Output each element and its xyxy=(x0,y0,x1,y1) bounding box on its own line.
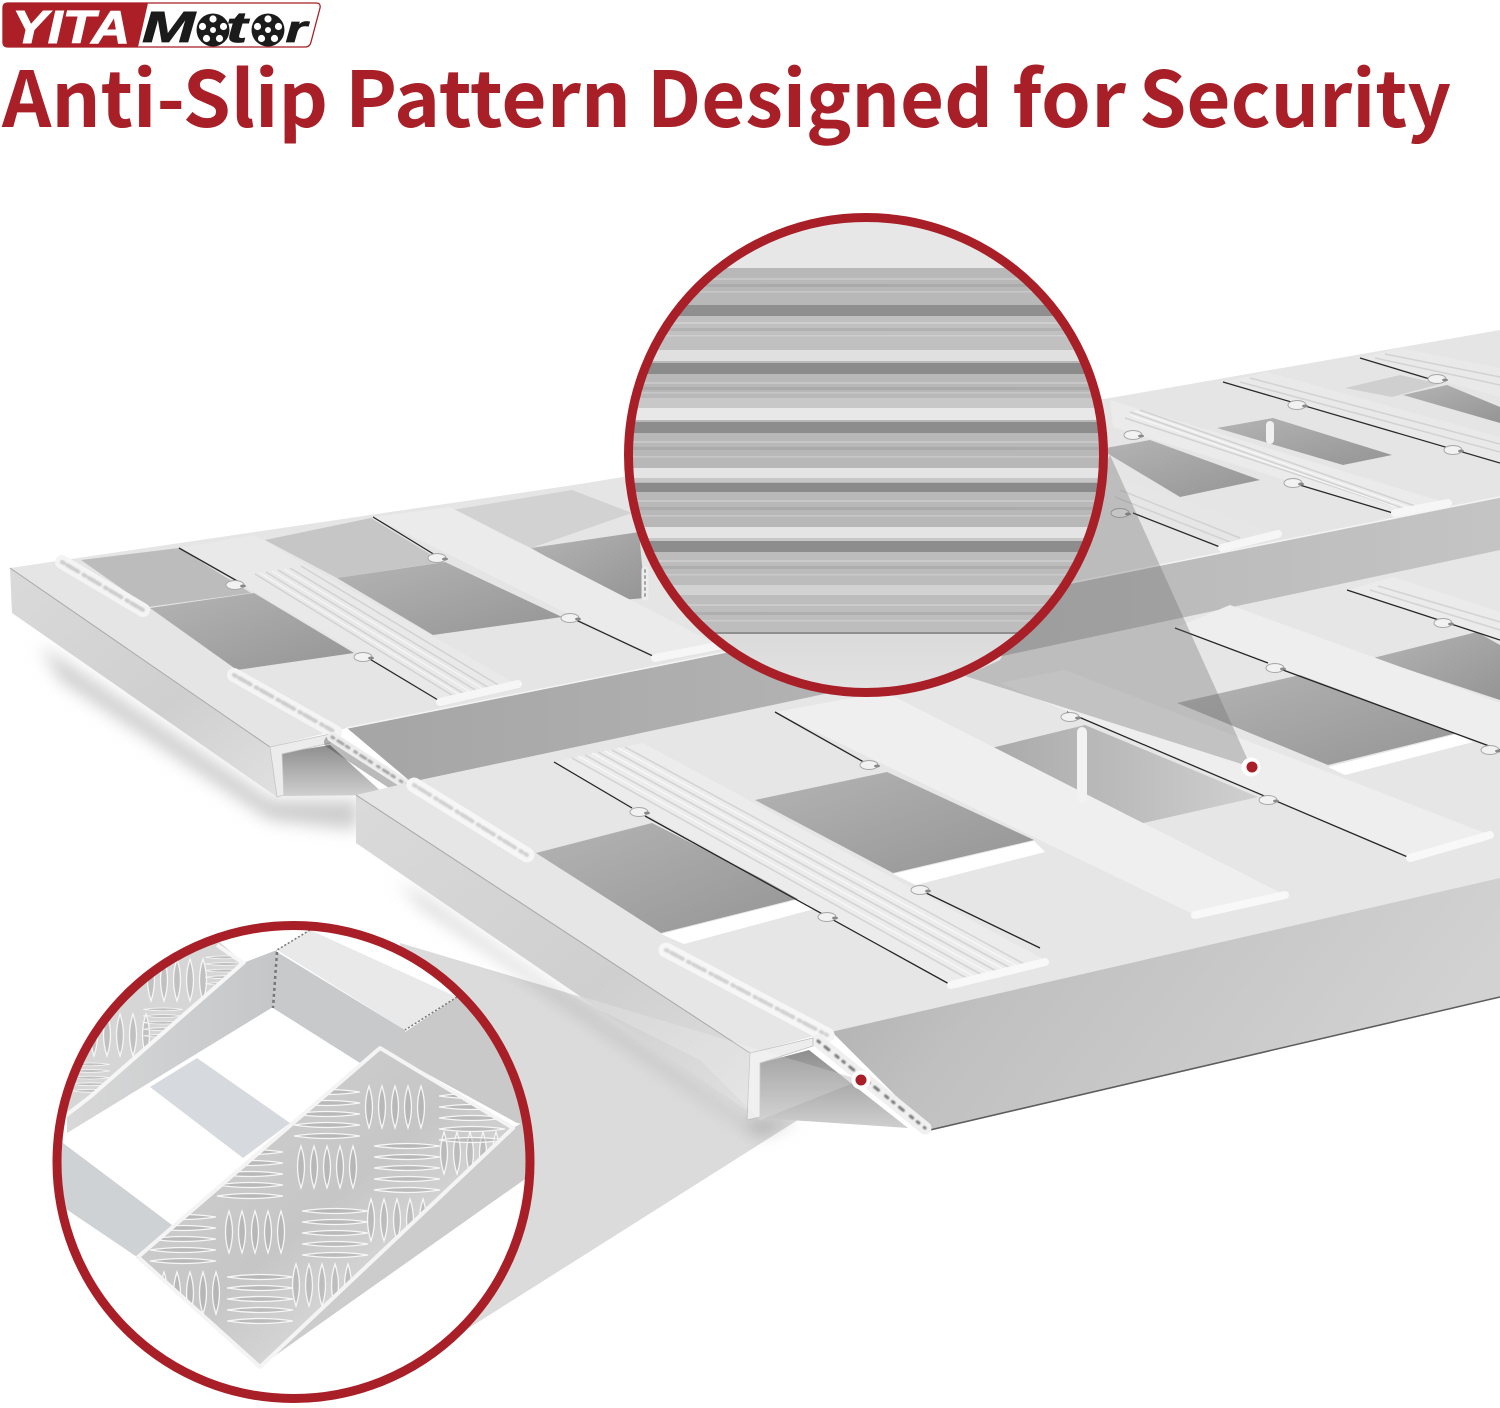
front ramp welds xyxy=(414,732,1490,1128)
magnified plate side wall xyxy=(275,1124,526,1356)
magnified upper diamond plate xyxy=(68,942,240,1109)
magnified diamond plate xyxy=(138,1048,513,1367)
title: Pattern xyxy=(345,39,631,150)
front ramp ribbed strips xyxy=(554,577,1500,985)
title: Security xyxy=(1139,39,1451,150)
icon: logo wheels xyxy=(196,14,284,46)
rear ramp welds xyxy=(62,425,1448,732)
weld between ramps xyxy=(330,737,410,792)
logo: YITA Motor: YITA xyxy=(12,1,130,53)
magnified ribbed surface xyxy=(620,268,1110,633)
rear deck tack welds xyxy=(226,374,1464,662)
title: for xyxy=(1012,39,1126,150)
front ramp seam lines xyxy=(554,590,1500,985)
title: Designed xyxy=(647,39,993,150)
marker: red dot on ramp corner xyxy=(852,1070,870,1090)
magnified floor and frame xyxy=(384,998,522,1124)
ramp shadows xyxy=(40,645,800,1136)
magnified deck above strip xyxy=(727,222,1004,268)
rear deck seam lines xyxy=(179,358,1500,700)
panel: rear ramp section xyxy=(10,330,1500,797)
rear deck ribbed strips xyxy=(179,348,1500,700)
logo: YITA Motor: o xyxy=(200,15,227,48)
front ramp angled end face xyxy=(830,875,1500,1130)
connector cone: upper magnifier to red dot xyxy=(965,455,1251,767)
logo: YITA Motor xyxy=(3,1,320,53)
logo: YITA Motor: t xyxy=(226,2,251,52)
callout: diamond plate magnifier xyxy=(20,925,560,1399)
title: Anti-Slip xyxy=(1,39,328,150)
front ramp side lip xyxy=(356,795,758,1118)
rear ramp front face xyxy=(347,497,1500,782)
marker: red dot on ribbed strip xyxy=(1242,758,1260,776)
connector cone: lower magnifier to red dot xyxy=(400,943,861,1340)
callout: ribbed strip magnifier xyxy=(620,210,1110,703)
rear lip channel xyxy=(282,745,385,796)
logo: YITA Motor: r xyxy=(286,8,310,51)
logo: YITA Motor: M xyxy=(142,2,197,52)
front ramp deck xyxy=(356,550,1500,1053)
logo: YITA Motor: o xyxy=(255,15,282,48)
front ramp openings xyxy=(536,632,1500,944)
rear ramp deck xyxy=(10,330,1500,747)
rear deck openings xyxy=(81,375,1500,670)
connector overlay: lower cone across ramp lip xyxy=(560,990,861,1120)
panel: front ramp section xyxy=(356,550,1500,1130)
front lip channel xyxy=(760,1050,908,1128)
magnified deck below strip xyxy=(718,634,1015,688)
rear ramp side lip xyxy=(10,568,277,797)
front ramp tack welds xyxy=(630,618,1500,922)
